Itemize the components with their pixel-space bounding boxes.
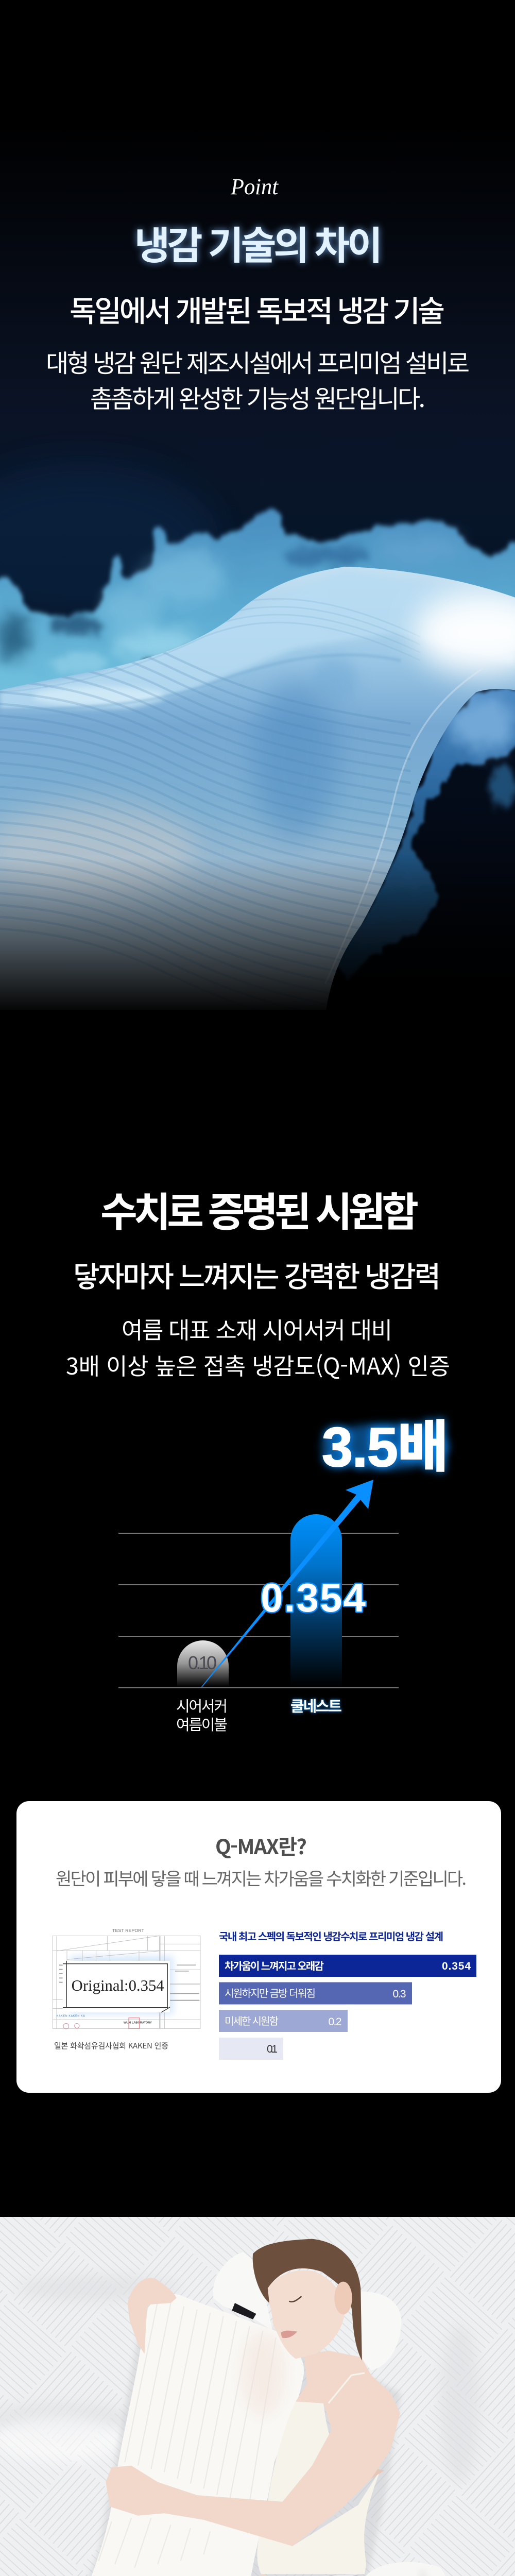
- fabric body: [0, 567, 515, 1043]
- panel: hero intro: [0, 0, 515, 1010]
- pajama pants: [324, 2574, 358, 2576]
- subheading: 닿자마자 느껴지는 강력한 냉감력: [73, 1254, 441, 1296]
- fabric ribs upper: [0, 599, 420, 692]
- woman skin: chest, arm, hands: [106, 2278, 400, 2576]
- heading: 수치로 증명된 시원함: [100, 1180, 419, 1238]
- bar 0.354: 0.354: [442, 1960, 471, 1972]
- subheading: 독일에서 개발된 독보적 냉감 기술: [70, 288, 445, 330]
- bottom fade to black: [0, 854, 515, 1020]
- bar 0.2: 0.2: [329, 2016, 342, 2028]
- headrest pillows: [213, 2252, 401, 2370]
- description: 3배 이상 높은 접촉 냉감도(Q-MAX) 인증: [66, 1348, 450, 1381]
- panel: Q-MAX explanation card: [16, 1801, 501, 2093]
- value: 0.354: 0.354: [261, 1575, 366, 1620]
- card description: 원단이 피부에 닿을 때 느껴지는 차가움을 수치화한 기준입니다.: [56, 1865, 467, 1890]
- pillow label: [232, 2303, 256, 2319]
- fold line: [0, 655, 401, 710]
- fabric ribs lower: [0, 652, 411, 955]
- arrow: [201, 1480, 373, 1687]
- test report image: KAKEN KAKEN KA: [57, 2015, 85, 2018]
- bed shadows: [0, 2275, 479, 2482]
- bar: coolnest: [290, 1514, 342, 1687]
- bar 0.1: [219, 2038, 283, 2060]
- smoke under fabric at right: [335, 689, 515, 980]
- test report image: WUXI LABORATORY: [124, 2021, 152, 2024]
- hair: [253, 2239, 362, 2361]
- test report image: TEST REPORT: [112, 1928, 145, 1933]
- bar: seersucker: [177, 1640, 229, 1687]
- description: 여름 대표 소재 시어서커 대비: [122, 1312, 392, 1345]
- seam line: [325, 668, 483, 984]
- heading: cooling technology difference: 냉감 기술의 차이: [134, 214, 383, 270]
- bar 0.2: 미세한 시원함: [225, 2013, 279, 2028]
- tank top: [268, 2401, 332, 2502]
- quilted bed: [0, 2217, 515, 2576]
- bar chart: Q-MAX comparison: [118, 1416, 450, 1735]
- grid lines: [118, 1533, 399, 1688]
- panel: measured coolness heading: [66, 1180, 450, 1381]
- label: seersucker blanket: [176, 1694, 228, 1735]
- description: [66, 1312, 450, 1381]
- bar 0.2: [219, 2010, 348, 2032]
- bar 0.3: [219, 1982, 412, 2004]
- test report image: [53, 1928, 200, 2029]
- callout: 3.5 times: 3.5배: [322, 1416, 449, 1478]
- body shadow: [89, 2304, 401, 2576]
- report caption: 일본 화확섬유검사협회 KAKEN 인증: [54, 2040, 168, 2051]
- label: coolnest: 쿨네스트: [290, 1694, 342, 1716]
- blanket: [366, 2562, 444, 2576]
- card title: Q-MAX란?: [215, 1831, 307, 1860]
- face: [267, 2270, 345, 2359]
- bar 0.354: [219, 1955, 476, 1977]
- bar 0.3: 시원하지만 금방 더워짐: [225, 1985, 316, 2000]
- closed eye and lips: [289, 2296, 302, 2302]
- hero description: 대형 냉감 원단 제조시설에서 프리미엄 설비로: [46, 343, 470, 379]
- legend title: 국내 최고 스펙의 독보적인 냉감수치로 프리미엄 냉감 설계: [219, 1928, 443, 1943]
- bar 0.354: 차가움이 느껴지고 오래감: [225, 1958, 324, 1973]
- test report image: Original:0.354: [72, 1977, 164, 1994]
- ear: [334, 2282, 352, 2314]
- smoke above fabric: [0, 509, 515, 704]
- image: woman hugging body pillow: [0, 2217, 515, 2576]
- bar 0.1: 0.1: [267, 2043, 278, 2055]
- strap: [329, 2373, 365, 2403]
- eyebrow: Point: Point: [230, 174, 279, 199]
- label: seersucker blanket: 시어서커: [176, 1694, 228, 1716]
- bar 0.3: 0.3: [392, 1988, 406, 2000]
- body pillow: [92, 2294, 304, 2576]
- blue ambient haze: [0, 463, 220, 621]
- hero gradient background: [0, 0, 515, 1010]
- hero description: 촘촘하게 완성한 기능성 원단입니다.: [90, 379, 425, 415]
- hero description: [46, 343, 470, 415]
- image: cooling fabric with blue smoke: [0, 463, 515, 1043]
- label: seersucker blanket: 여름이불: [176, 1713, 228, 1735]
- value: 0.10: 0.10: [188, 1652, 217, 1673]
